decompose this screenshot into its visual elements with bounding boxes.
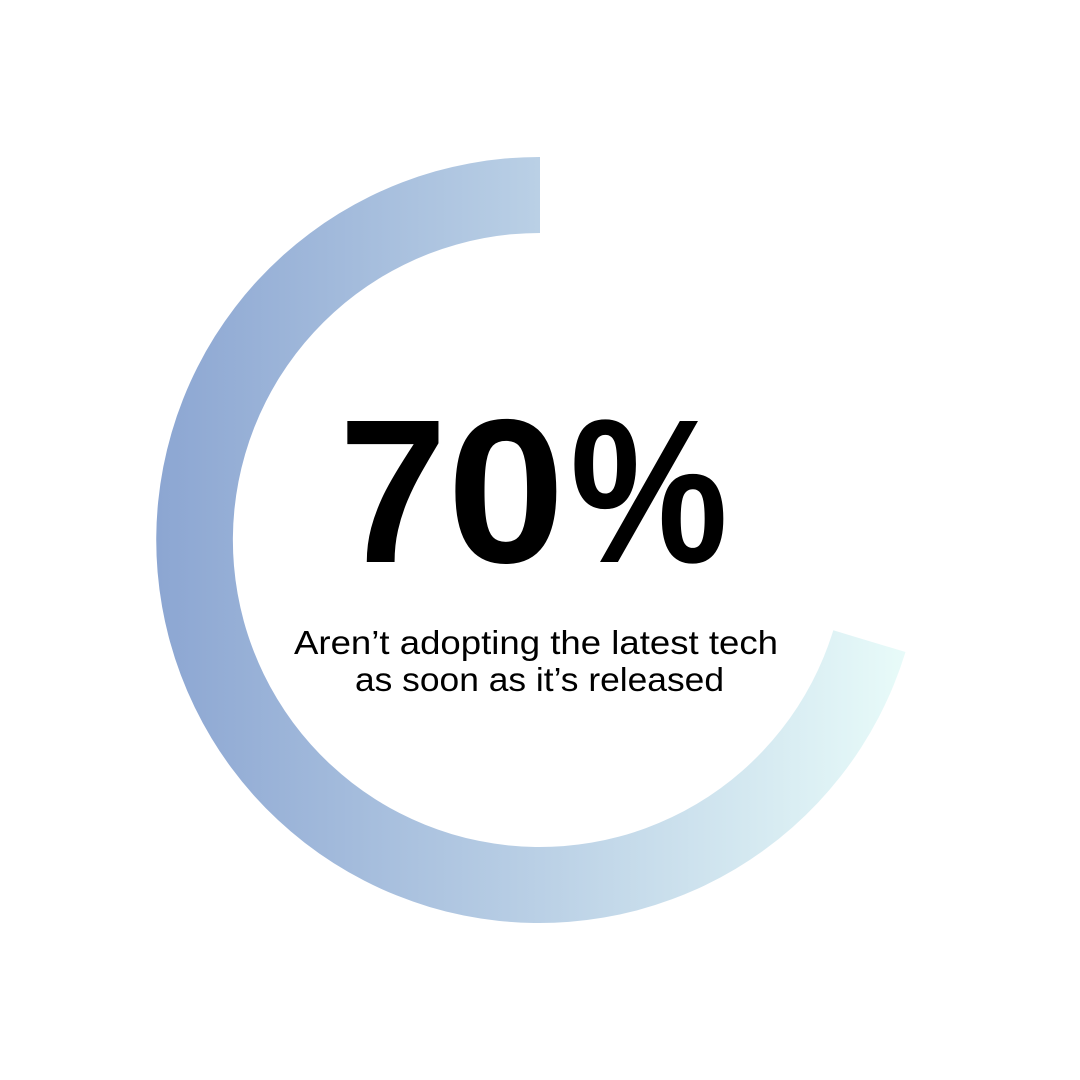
caption text: [294, 624, 778, 698]
big statistic: 70%: 7: [339, 377, 447, 606]
big statistic: 70%: 0: [447, 377, 565, 606]
caption text: Aren’t adopting the latest tech: [294, 624, 778, 661]
caption text: as soon as it’s released: [355, 661, 724, 698]
big statistic: 70%: [339, 377, 728, 606]
donut progress arc: 70%: [156, 157, 906, 923]
big statistic: 70%: %: [570, 377, 728, 606]
